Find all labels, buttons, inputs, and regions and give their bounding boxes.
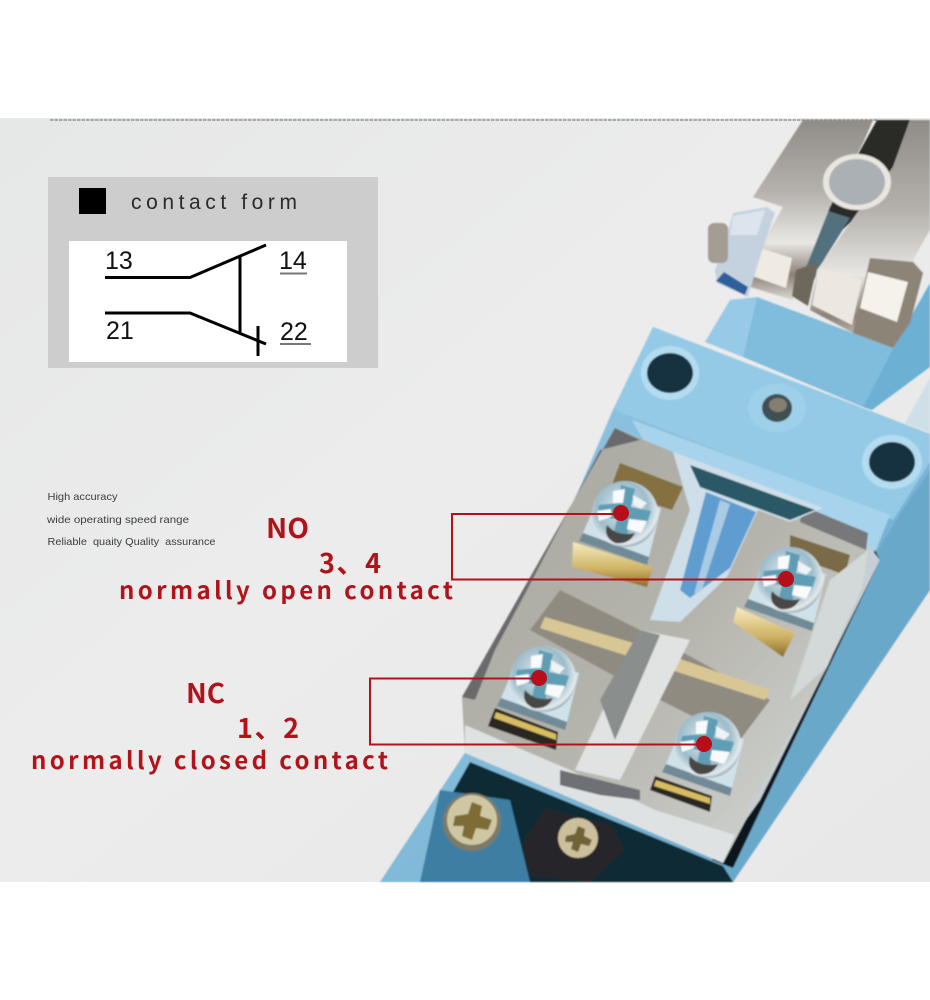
marker terminal 2 xyxy=(696,736,712,752)
left lever arm xyxy=(750,120,873,300)
lower terminal screw xyxy=(443,793,501,851)
housing top face xyxy=(615,327,930,520)
NC stop xyxy=(256,326,260,356)
transparent terminal cover xyxy=(462,428,880,863)
rivet xyxy=(823,154,891,210)
terminal plate reflection xyxy=(530,590,770,740)
NO description: normally open contact xyxy=(119,571,453,606)
rear contacts xyxy=(610,463,683,510)
bolt end xyxy=(708,223,728,263)
cover clear right shoulder xyxy=(790,550,868,700)
NC label: NC xyxy=(186,672,225,711)
feature 2: wide operating speed range xyxy=(46,514,189,526)
callout: normally open xyxy=(119,505,794,606)
label 13: 13 xyxy=(105,247,133,275)
linkage xyxy=(238,256,242,334)
cover dark rim xyxy=(462,428,640,700)
screw 1 xyxy=(497,646,579,730)
contact NO line xyxy=(105,245,266,278)
terminal numbers 3 4: 3、4 xyxy=(319,542,381,581)
switch interior xyxy=(420,420,890,882)
brass terminal 4 xyxy=(733,607,795,657)
cover front lip xyxy=(465,725,735,863)
contact NC line xyxy=(105,313,266,344)
heading: contact form xyxy=(131,191,297,214)
feature 3: Reliable quaity Quality assurance xyxy=(48,536,216,548)
feature list xyxy=(46,491,216,548)
right lever arm xyxy=(810,120,930,348)
centre ridge xyxy=(575,630,690,780)
metal lever xyxy=(708,120,930,348)
NO label: NO xyxy=(266,507,309,546)
lever slot xyxy=(800,120,910,300)
left mounting hole xyxy=(641,346,699,400)
marker terminal 3 xyxy=(613,505,629,521)
marker terminal 4 xyxy=(778,571,794,587)
marker terminal 1 xyxy=(531,670,547,686)
right mounting hole xyxy=(862,435,922,489)
brass terminal 1 xyxy=(488,708,558,750)
photo: limit switch xyxy=(380,120,930,882)
photo background xyxy=(0,118,930,882)
screw 2 xyxy=(662,712,744,796)
lock nut xyxy=(715,207,775,297)
NC description: normally closed contact xyxy=(31,741,388,776)
threaded hole xyxy=(748,384,806,432)
brass terminal 2 xyxy=(650,776,712,812)
leader lines NC xyxy=(370,678,704,744)
heading bullet xyxy=(79,188,106,214)
label 14: 14 xyxy=(279,247,307,275)
black clamp with screw xyxy=(522,808,625,882)
cover notch xyxy=(650,452,823,622)
screw 3 xyxy=(579,481,661,565)
dashed rule xyxy=(50,119,878,121)
brass terminal 3 xyxy=(572,542,653,587)
panel: contact form xyxy=(48,177,378,368)
callout: normally closed xyxy=(31,670,712,776)
right roller xyxy=(853,258,923,348)
switch housing xyxy=(380,327,930,882)
switch neck xyxy=(705,283,930,433)
terminal numbers 1 2: 1、2 xyxy=(237,707,299,746)
leader lines NO xyxy=(452,514,786,580)
screw 4 xyxy=(744,547,826,631)
label 21: 21 xyxy=(106,317,134,345)
label 22: 22 xyxy=(280,318,308,346)
connecting screw xyxy=(792,262,818,306)
housing side highlight xyxy=(712,470,930,882)
feature 1: High accuracy xyxy=(48,491,118,503)
cover top right rim xyxy=(800,506,868,550)
contact diagram xyxy=(69,241,347,362)
